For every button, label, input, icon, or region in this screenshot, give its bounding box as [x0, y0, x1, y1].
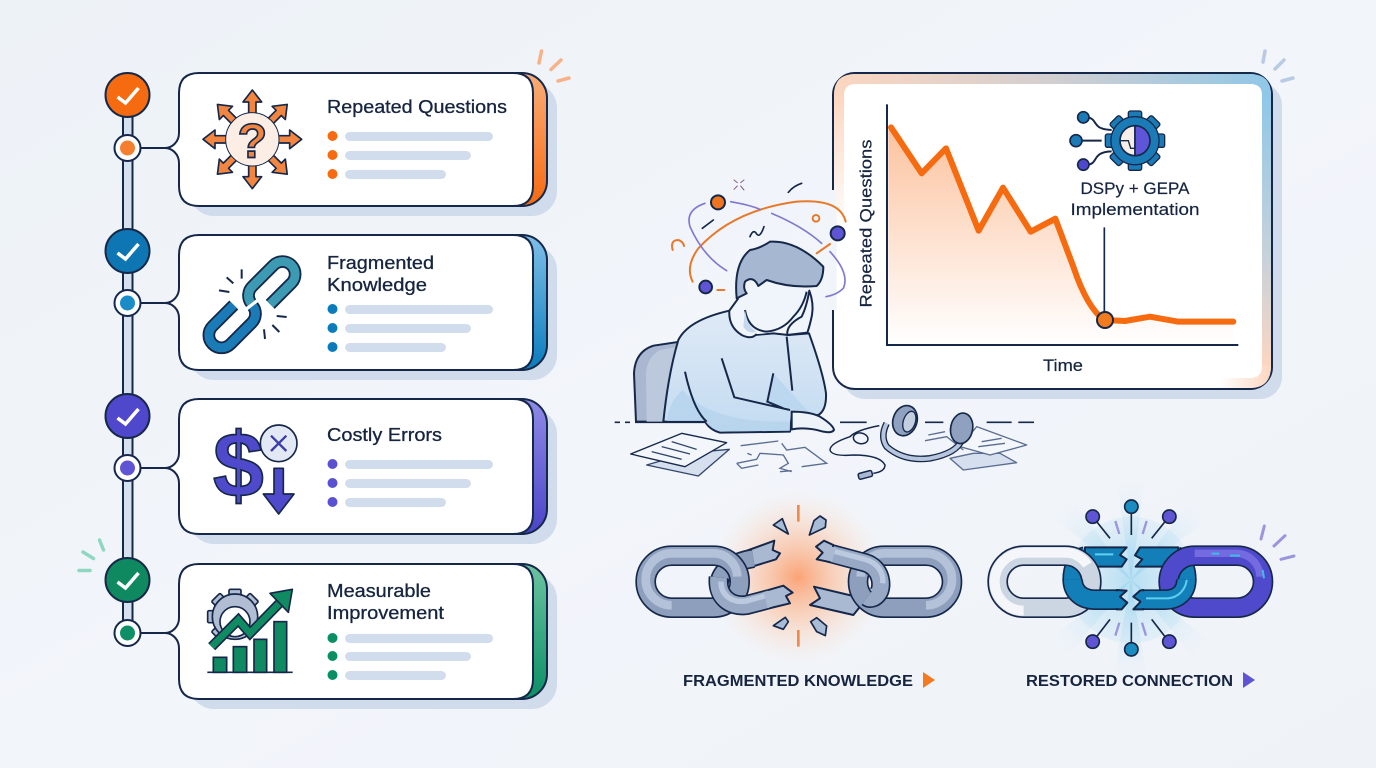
chart annotation: DSPy + GEPA: [1080, 179, 1190, 198]
hook left front: [1073, 579, 1118, 600]
illustration: restored chain: [995, 480, 1294, 690]
icon: dollar and down arrow: [213, 415, 297, 517]
hook right front: [830, 551, 883, 598]
node: blue: [114, 290, 140, 316]
badge: orange check: [106, 73, 150, 117]
resting hand: [792, 412, 834, 432]
node: orange: [114, 135, 140, 161]
hook left behind: [719, 558, 753, 585]
broken arm: lower right: [810, 587, 863, 615]
hook left front: [718, 577, 768, 605]
marker line: [1102, 227, 1107, 313]
badge: purple check: [106, 394, 150, 438]
neck and face: [729, 273, 810, 337]
timeline badges: [106, 73, 150, 646]
node: purple: [114, 455, 140, 481]
cable: [830, 426, 885, 480]
chart area: [888, 127, 1233, 344]
link right: [858, 553, 952, 608]
light rays: [1037, 480, 1227, 677]
panel: line chart: Implementation: [1070, 200, 1200, 219]
panel: measurable improvement: Improvement: [327, 603, 444, 623]
illustration: fragmented chain: [646, 489, 952, 690]
chart axes: [887, 104, 1238, 345]
chair: [634, 342, 680, 422]
badge: green check: [106, 558, 150, 602]
illustration: overwhelmed person at desk: [615, 180, 1034, 480]
icon: gear and rising chart: [207, 589, 293, 672]
panel: measurable improvement: [140, 564, 557, 709]
label: RESTORED CONNECTION: [1026, 673, 1233, 690]
heading: Measurable: [327, 581, 431, 601]
label: FRAGMENTED KNOWLEDGE: [683, 673, 913, 690]
bullet list: [328, 304, 493, 352]
icon: question with arrows: [203, 90, 302, 189]
heading: Repeated Questions: [327, 97, 507, 117]
broken tip: lower left: [763, 586, 793, 608]
marker dot: [1097, 312, 1113, 328]
hair: [736, 242, 823, 298]
desk line: [615, 420, 1034, 425]
y axis label: Repeated Questions: [856, 140, 876, 308]
broken ends: [1114, 590, 1146, 609]
icon: broken chain: [204, 256, 300, 353]
broken arm: upper left: [735, 541, 780, 570]
panel: line chart: [833, 73, 1282, 399]
fragments: [773, 516, 827, 636]
icon: dollar and down arrow: $: [213, 415, 264, 517]
panel frame gradient: [834, 74, 1271, 388]
link left: [646, 553, 740, 608]
icon: ai gear: [1070, 111, 1165, 170]
node: green: [114, 620, 140, 646]
sparks: [1261, 526, 1294, 559]
icon: question with arrows: ?: [238, 114, 267, 168]
headset: [883, 402, 975, 459]
orange glow: [710, 489, 886, 665]
right papers: [925, 427, 1027, 470]
hook right front: [1142, 579, 1187, 600]
heading: Fragmented: [327, 253, 434, 273]
sparks: green badge: [79, 540, 104, 570]
sparks: card corner: [539, 51, 569, 81]
bullet list: [328, 459, 493, 507]
sparks: chart corner: [1263, 51, 1293, 81]
panel: fragmented knowledge: [140, 235, 557, 380]
heading: Costly Errors: [327, 425, 442, 445]
panel: fragmented knowledge: Knowledge: [327, 275, 427, 295]
scattered papers: [631, 433, 729, 476]
raised hand: [787, 291, 813, 335]
broken tip: upper right: [816, 541, 836, 562]
link silver: [995, 553, 1091, 611]
hooks behind: [1073, 557, 1186, 580]
link purple: [1169, 553, 1264, 608]
panel: costly errors: [140, 399, 557, 544]
torn paper: [737, 441, 827, 472]
arrow: [923, 672, 935, 688]
body: [663, 311, 826, 433]
network nodes: [1086, 500, 1176, 656]
panel: repeated questions: [140, 73, 557, 216]
bullet list: [328, 633, 493, 680]
bullet list: [328, 131, 493, 179]
top bars: [1085, 547, 1178, 567]
chart line: [891, 127, 1233, 322]
arrow: [1243, 672, 1255, 688]
timeline rail: [123, 95, 132, 633]
badge: blue check: [106, 229, 150, 273]
confusion orbits: [672, 180, 846, 297]
x axis label: Time: [1043, 356, 1083, 375]
